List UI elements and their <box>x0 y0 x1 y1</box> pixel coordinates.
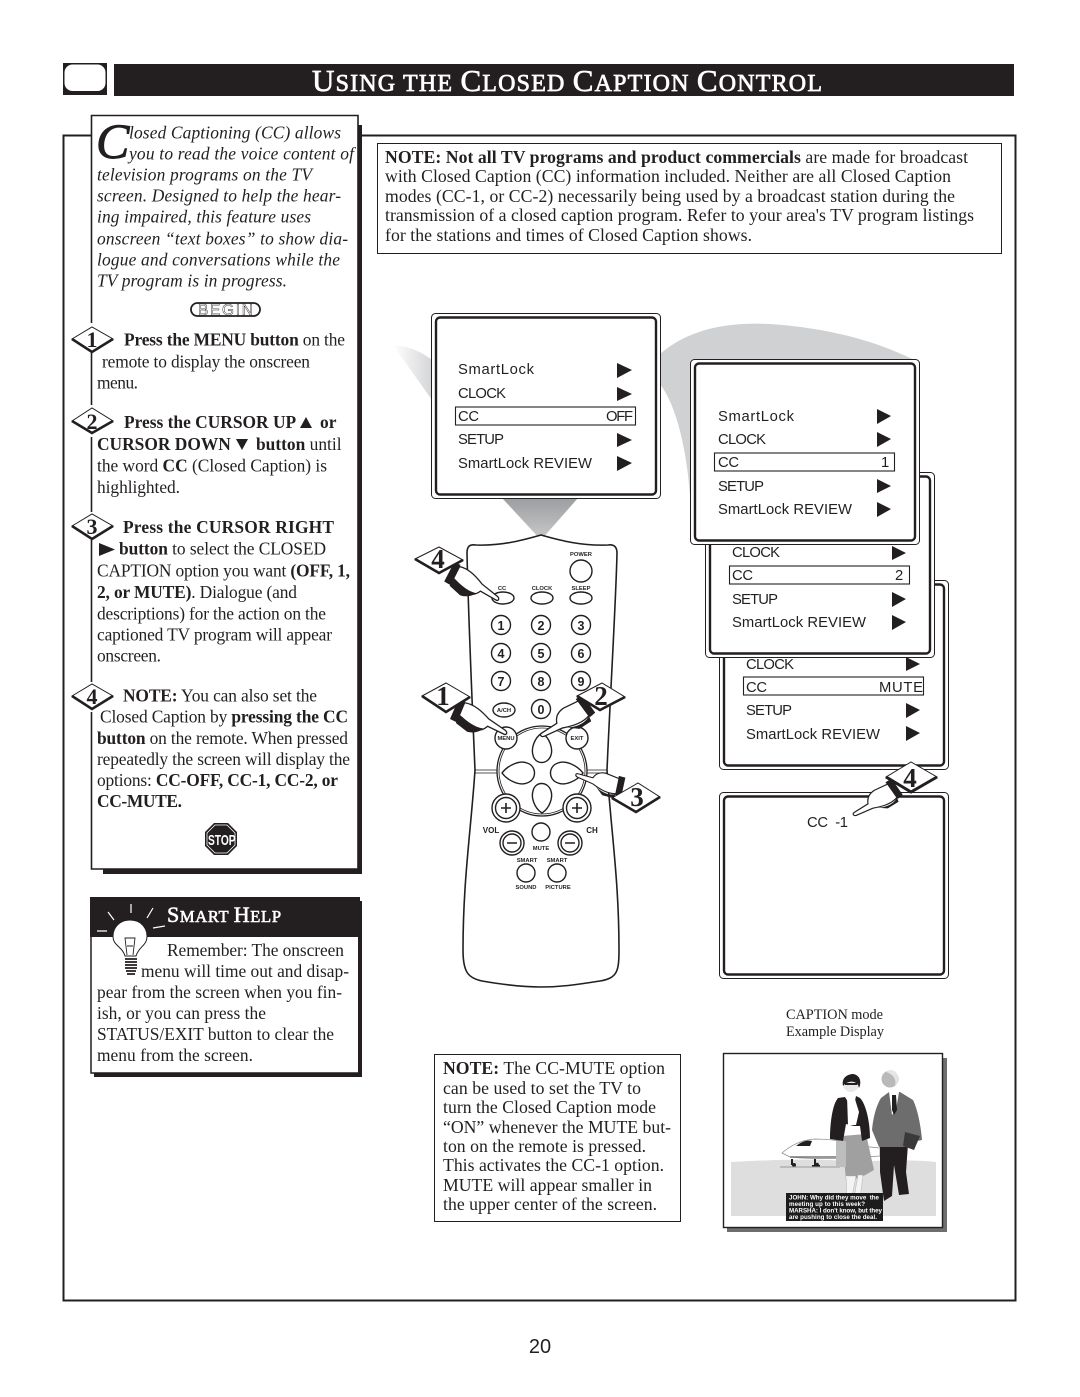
tv screen: menu 2: CC <box>732 568 753 584</box>
remote control: CLOCK <box>532 586 553 592</box>
note box: top: with Closed Caption (CC) information included. Neither are all Closed Caption <box>385 166 951 186</box>
step 4: options: CC-OFF, CC-1, CC-2, or <box>97 770 338 790</box>
intro text: onscreen “text boxes” to show dia- <box>97 228 348 248</box>
caption text box: are pushing to close the deal. <box>789 1214 877 1221</box>
tv screen: menu off: SmartLock <box>458 362 535 378</box>
smart help text <box>97 940 349 1065</box>
number keypad: 4 <box>498 647 505 661</box>
caption mode label <box>786 1007 885 1040</box>
smart help text: STATUS/EXIT button to clear the <box>97 1024 334 1044</box>
step 2: 2 <box>86 409 98 434</box>
step 2: Press the CURSOR UP <box>124 412 297 432</box>
note box: mute: “ON” whenever the MUTE but- <box>443 1117 671 1137</box>
number keypad: 5 <box>538 647 545 661</box>
step 3 <box>72 514 350 666</box>
smart help heading: SMART HELP <box>167 902 281 927</box>
title bar <box>114 63 1014 98</box>
icon: tv <box>63 63 107 95</box>
step 2 <box>72 408 342 497</box>
title bar: USING THE CLOSED CAPTION CONTROL <box>312 63 822 98</box>
step 4: CC-MUTE. <box>97 791 182 811</box>
smart help text: Remember: The onscreen <box>167 940 344 960</box>
hand with badge 3: cursor right: 3 <box>630 782 644 812</box>
tv screen: cc display <box>720 792 948 978</box>
remote control: MENU <box>497 736 515 742</box>
step 2: the word CC (Closed Caption) is <box>97 456 327 476</box>
note box: top: modes (CC-1, or CC-2) necessarily being used by a broadcast station during the <box>385 186 955 206</box>
smart help text: menu from the screen. <box>97 1045 253 1065</box>
tv screen: menu 1: CC <box>718 455 739 471</box>
smart help text: menu will time out and disap- <box>141 961 349 981</box>
volume and channel buttons: CH <box>586 826 598 835</box>
hand with badge 4: screen: 4 <box>903 763 917 793</box>
note box: mute: This activates the CC-1 option. <box>443 1155 664 1175</box>
tv screen: menu mute: MUTE <box>879 680 923 696</box>
step 1: remote to display the onscreen <box>102 352 310 372</box>
man figure <box>872 1070 922 1201</box>
intro text: losed Captioning (CC) allows <box>129 122 341 142</box>
icon: stop sign: STOP <box>208 831 236 849</box>
step 4: button on the remote. When pressed <box>97 728 348 748</box>
hand with badge 2: cursor up: 2 <box>594 681 608 711</box>
cursor buttons <box>502 733 583 813</box>
note box: mute: NOTE: The CC-MUTE option <box>443 1058 665 1078</box>
panel: smart help <box>90 897 362 1077</box>
caption text box: meeting up to this week? <box>789 1201 865 1208</box>
step 4: 4 <box>86 684 98 709</box>
tv screen: menu off <box>432 314 660 498</box>
caption mode label: Example Display <box>786 1024 885 1040</box>
intro text: TV program is in progress. <box>97 270 287 290</box>
tv screen: menu 2: CLOCK <box>732 545 780 561</box>
step 3: button to select the CLOSED <box>119 538 326 558</box>
tv screen: cc display: CC -1 <box>807 815 848 831</box>
intro text <box>97 122 356 290</box>
tv screen: menu mute: CC <box>746 680 767 696</box>
step 2: button until <box>256 434 342 454</box>
hand with badge 1: menu button <box>422 681 512 748</box>
step 3: 2, or MUTE). Dialogue (and <box>97 582 297 602</box>
tv screen: menu 1: 1 <box>881 455 889 471</box>
remote control: SMART <box>517 858 538 864</box>
tv screen: menu mute: SmartLock REVIEW <box>746 727 880 743</box>
number keypad: 6 <box>578 647 585 661</box>
number keypad: 2 <box>538 619 545 633</box>
tv screen: menu off: CC <box>458 409 479 425</box>
smart help text: ish, or you can press the <box>97 1003 266 1023</box>
number keypad <box>492 616 590 718</box>
step 4: Closed Caption by pressing the CC <box>100 706 348 726</box>
remote control: PICTURE <box>545 885 571 891</box>
step 4 <box>72 684 350 811</box>
drop cap: C <box>96 113 130 169</box>
tv screen: menu off: SETUP <box>458 432 504 448</box>
hand with badge 4: screen <box>848 762 937 826</box>
step 1 <box>72 327 345 392</box>
remote control <box>463 535 619 987</box>
hand with badge 1: menu button: 1 <box>436 681 450 711</box>
tv screen: menu 2: SETUP <box>732 592 778 608</box>
number keypad: 9 <box>578 675 585 689</box>
remote control: SLEEP <box>571 586 591 592</box>
note box: mute: turn the Closed Caption mode <box>443 1097 656 1117</box>
airplane <box>780 1139 880 1167</box>
tv screen: menu off: SmartLock REVIEW <box>458 456 592 472</box>
tv screen: menu off: CLOCK <box>458 386 506 402</box>
step 3: 3 <box>86 514 98 539</box>
hand with badge 2: cursor up <box>534 681 625 749</box>
intro text: television programs on the TV <box>97 164 314 184</box>
tv screen: menu off: OFF <box>606 409 633 425</box>
hand with badge 3: cursor right <box>572 765 660 812</box>
caption mode label: CAPTION mode <box>786 1007 883 1023</box>
icon: light bulb <box>97 904 165 974</box>
tv screen: menu 1: SmartLock REVIEW <box>718 502 852 518</box>
tv screen: menu 1: CLOCK <box>718 432 766 448</box>
step 4: repeatedly the screen will display the <box>97 749 350 769</box>
remote control: CC <box>498 586 507 592</box>
remote control: SOUND <box>516 885 536 891</box>
note box: mute: ton on the remote is pressed. <box>443 1136 646 1156</box>
volume and channel buttons: VOL <box>483 826 499 835</box>
tv screen: menu mute: SETUP <box>746 703 792 719</box>
tv screen: menu 2: 2 <box>895 568 903 584</box>
remote control: SMART <box>547 858 568 864</box>
tv screen: menu 2: SmartLock REVIEW <box>732 615 866 631</box>
smart help text: pear from the screen when you fin- <box>97 982 342 1002</box>
step 1: Press the MENU button on the <box>124 330 345 350</box>
intro text: screen. Designed to help the hear- <box>97 186 341 206</box>
number keypad: 8 <box>538 675 545 689</box>
woman figure <box>830 1074 874 1198</box>
tv screen: menu 1: SmartLock <box>718 409 795 425</box>
remote control: A/CH <box>497 708 511 714</box>
number keypad: 7 <box>498 675 505 689</box>
remote control: MUTE <box>533 846 549 852</box>
number keypad: 3 <box>578 619 585 633</box>
caption text box: JOHN: Why did they move the <box>789 1194 880 1202</box>
note box: mute <box>434 1054 680 1222</box>
remote control: POWER <box>570 552 593 558</box>
step 2: or <box>320 412 337 432</box>
step 3: onscreen. <box>97 646 161 666</box>
number keypad: 0 <box>538 703 545 717</box>
remote control: EXIT <box>571 736 584 742</box>
caption text box <box>786 1193 883 1221</box>
hand with badge 4: cc button: 4 <box>431 544 445 574</box>
tv screen: menu mute <box>720 580 948 770</box>
note box: mute: MUTE will appear smaller in <box>443 1175 652 1195</box>
tv screen: menu 1 <box>690 360 920 544</box>
step 2: CURSOR DOWN <box>97 434 231 454</box>
tv screen: menu 2 <box>706 472 934 658</box>
step 3: Press the CURSOR RIGHT <box>123 517 334 537</box>
main frame <box>64 136 1016 1300</box>
step 3: descriptions) for the action on the <box>97 604 326 624</box>
tv screen: menu 1: SETUP <box>718 479 764 495</box>
begin badge: BEGIN <box>198 302 253 319</box>
step 3: captioned TV program will appear <box>97 624 332 644</box>
intro text: you to read the voice content of <box>127 144 356 164</box>
icon: stop sign <box>205 823 237 855</box>
tv screen: menu mute: CLOCK <box>746 657 794 673</box>
note box: top: transmission of a closed caption program. Refer to your area's TV program listings <box>385 205 974 225</box>
note box: top: NOTE: Not all TV programs and product commercials are made for broadcast <box>385 147 968 167</box>
page number: 20 <box>529 1336 551 1358</box>
number keypad: 1 <box>498 619 505 633</box>
hand with badge 4: cc button <box>415 544 504 613</box>
note box: mute: can be used to set the TV to <box>443 1078 641 1098</box>
step 1: 1 <box>86 327 98 352</box>
intro text: ing impaired, this feature uses <box>97 206 311 226</box>
step 1: menu. <box>97 372 138 392</box>
note box: top: for the stations and times of Closed Caption shows. <box>385 225 752 245</box>
grey swoosh backgrounds <box>393 324 918 540</box>
intro text: logue and conversations while the <box>97 250 340 270</box>
caption text box: MARSHA: I don't know, but they <box>789 1208 883 1214</box>
panel: intro and steps <box>72 113 362 874</box>
note box: mute: the upper center of the screen. <box>443 1194 657 1214</box>
example photo with caption <box>724 1054 947 1232</box>
step 3: CAPTION option you want (OFF, 1, <box>97 560 350 580</box>
note box: top <box>378 144 1002 254</box>
volume and channel buttons <box>483 794 598 855</box>
ground <box>731 1160 936 1216</box>
step 4: NOTE: You can also set the <box>123 686 317 706</box>
step 2: highlighted. <box>97 477 180 497</box>
